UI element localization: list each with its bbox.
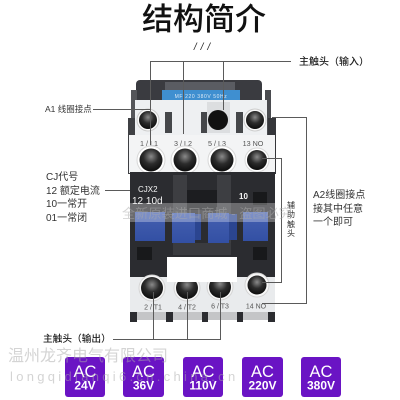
voltage badge 380V	[301, 357, 341, 397]
label: auxiliary contact: 触	[287, 219, 295, 229]
label: main contact output: 主触头（输出）	[43, 332, 111, 345]
upper main terminals	[137, 146, 269, 174]
model text on housing: 12 10d	[132, 196, 163, 207]
voltage badge 110V: AC	[192, 363, 215, 381]
label: auxiliary contact: 头	[287, 228, 295, 238]
voltage badge 110V: 110V	[189, 378, 217, 392]
watermark text	[8, 205, 292, 384]
blue rating label: MF 220 380V 50Hz	[175, 94, 227, 100]
title: 结构简介	[142, 2, 266, 37]
voltage badge 380V: AC	[310, 363, 333, 381]
lower terminal labels: 4 / T2	[178, 304, 196, 312]
label: A2 coil contact: 接其中任意	[313, 202, 363, 215]
voltage badge 380V: 380V	[307, 378, 335, 392]
voltage badge 24V: AC	[74, 363, 97, 381]
label: A2 coil contact	[313, 188, 365, 228]
mounting feet	[130, 312, 275, 322]
upper terminal labels: 1 / L1	[140, 139, 158, 148]
lower terminal labels	[144, 304, 267, 312]
watermark text: longqidianqi6.cn.china.cn	[10, 369, 238, 384]
label: CJ code description: 01一常闭	[46, 211, 87, 224]
upper terminal labels	[140, 139, 264, 148]
label: auxiliary contact	[287, 200, 295, 238]
voltage badge 24V	[65, 357, 105, 397]
lower terminal labels: 6 / T3	[211, 304, 229, 310]
model text on housing: 10	[239, 192, 248, 201]
watermark text: 温州龙齐电气有限公司	[8, 347, 168, 365]
model text on housing: CJX2	[138, 185, 158, 194]
voltage badge 36V	[123, 357, 164, 397]
slash marks: ///	[193, 42, 214, 53]
voltage badge 36V: 36V	[133, 378, 154, 392]
voltage badge 220V	[242, 357, 283, 397]
lower terminal labels: 2 / T1	[144, 304, 162, 312]
blue actuator blocks	[135, 212, 268, 243]
label: auxiliary contact: 辅	[287, 200, 295, 210]
upper terminal labels: 5 / L3	[208, 139, 226, 148]
label: CJ code description: 12 额定电流	[46, 184, 100, 197]
label: A2 coil contact: A2线圈接点	[313, 188, 365, 201]
upper terminal labels: 3 / L2	[174, 139, 192, 148]
blue rating label	[162, 90, 240, 101]
voltage badge 220V: AC	[251, 363, 274, 381]
leader lines	[93, 62, 306, 340]
upper terminal labels: 13 NO	[243, 139, 264, 148]
upper coil terminals	[137, 109, 266, 131]
label: A1 coil contact: A1 线圈接点	[45, 104, 92, 114]
watermark text: 全新原装进口商城 - 盗图必究	[122, 205, 292, 221]
label: A2 coil contact: 一个即可	[313, 216, 353, 228]
voltage badge 36V: AC	[132, 363, 155, 381]
watermark band	[128, 203, 278, 222]
model text on housing	[132, 185, 248, 207]
lower terminals	[139, 273, 269, 301]
label: main contact input: 主触头（输入）	[299, 55, 369, 68]
contactor device	[128, 80, 276, 322]
voltage badge 24V: 24V	[74, 378, 96, 392]
voltage badge 110V	[183, 357, 223, 397]
label: auxiliary contact: 助	[287, 209, 295, 219]
label: CJ code description: CJ代号	[46, 171, 78, 183]
voltage badge 220V: 220V	[248, 378, 277, 392]
label: CJ code description	[46, 171, 100, 224]
label: CJ code description: 10一常开	[46, 197, 87, 210]
lower terminal labels: 14 NO	[246, 304, 267, 310]
